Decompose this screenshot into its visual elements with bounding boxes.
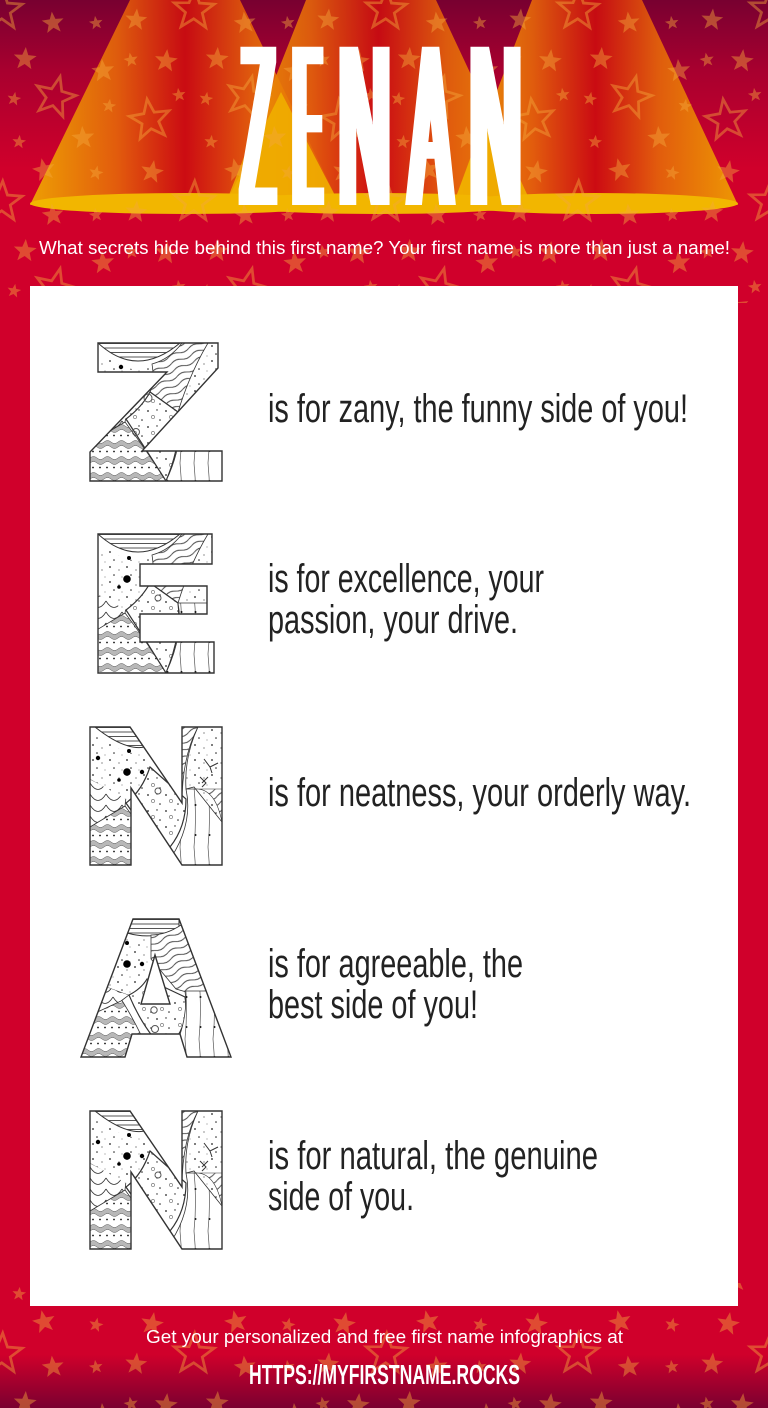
spotlight pool: middle [224,193,532,214]
icon: patterned letter N [90,727,222,865]
infographic canvas: N [470,0,521,254]
spotlight pool: left [30,193,340,214]
spotlight: middle cone [225,0,532,205]
icon: patterned letter E [90,534,222,673]
spotlight overlap: right [453,110,532,205]
text: second N lines: side of you. [268,1175,414,1219]
footer text: Get your personalized and free first name infographics at [146,1327,623,1347]
spotlights [30,0,738,214]
text: E lines: passion, your drive. [268,598,518,642]
spotlight pool: right [452,193,738,214]
text: E lines: is for excellence, your [268,557,544,601]
text: second N lines: is for natural, the genuine [268,1134,598,1178]
icon: patterned letter Z [90,343,222,481]
plain right margin [738,303,768,1283]
row: N [90,727,691,865]
row: second N [90,1111,598,1249]
icon: patterned letter A [81,919,231,1057]
title: E [294,0,320,254]
row: E [90,534,544,673]
spotlight overlap: left [225,92,340,205]
row: A [81,919,523,1057]
row: Z [90,343,688,481]
title: A [410,0,450,254]
panel: white letter list [30,286,738,1306]
spotlight: left cone [30,0,340,205]
title: N [339,0,390,254]
text: A lines: best side of you! [268,983,478,1027]
title: Z [242,0,274,254]
icon: patterned letter N [90,1111,222,1249]
footer url: HTTPS://MYFIRSTNAME.ROCKS [249,1359,520,1390]
plain left margin [0,303,30,1283]
text: A lines: is for agreeable, the [268,942,523,986]
subtitle: What secrets hide behind this first name? Your first name is more than just a name! [39,238,730,258]
spotlight: right cone [453,0,738,205]
